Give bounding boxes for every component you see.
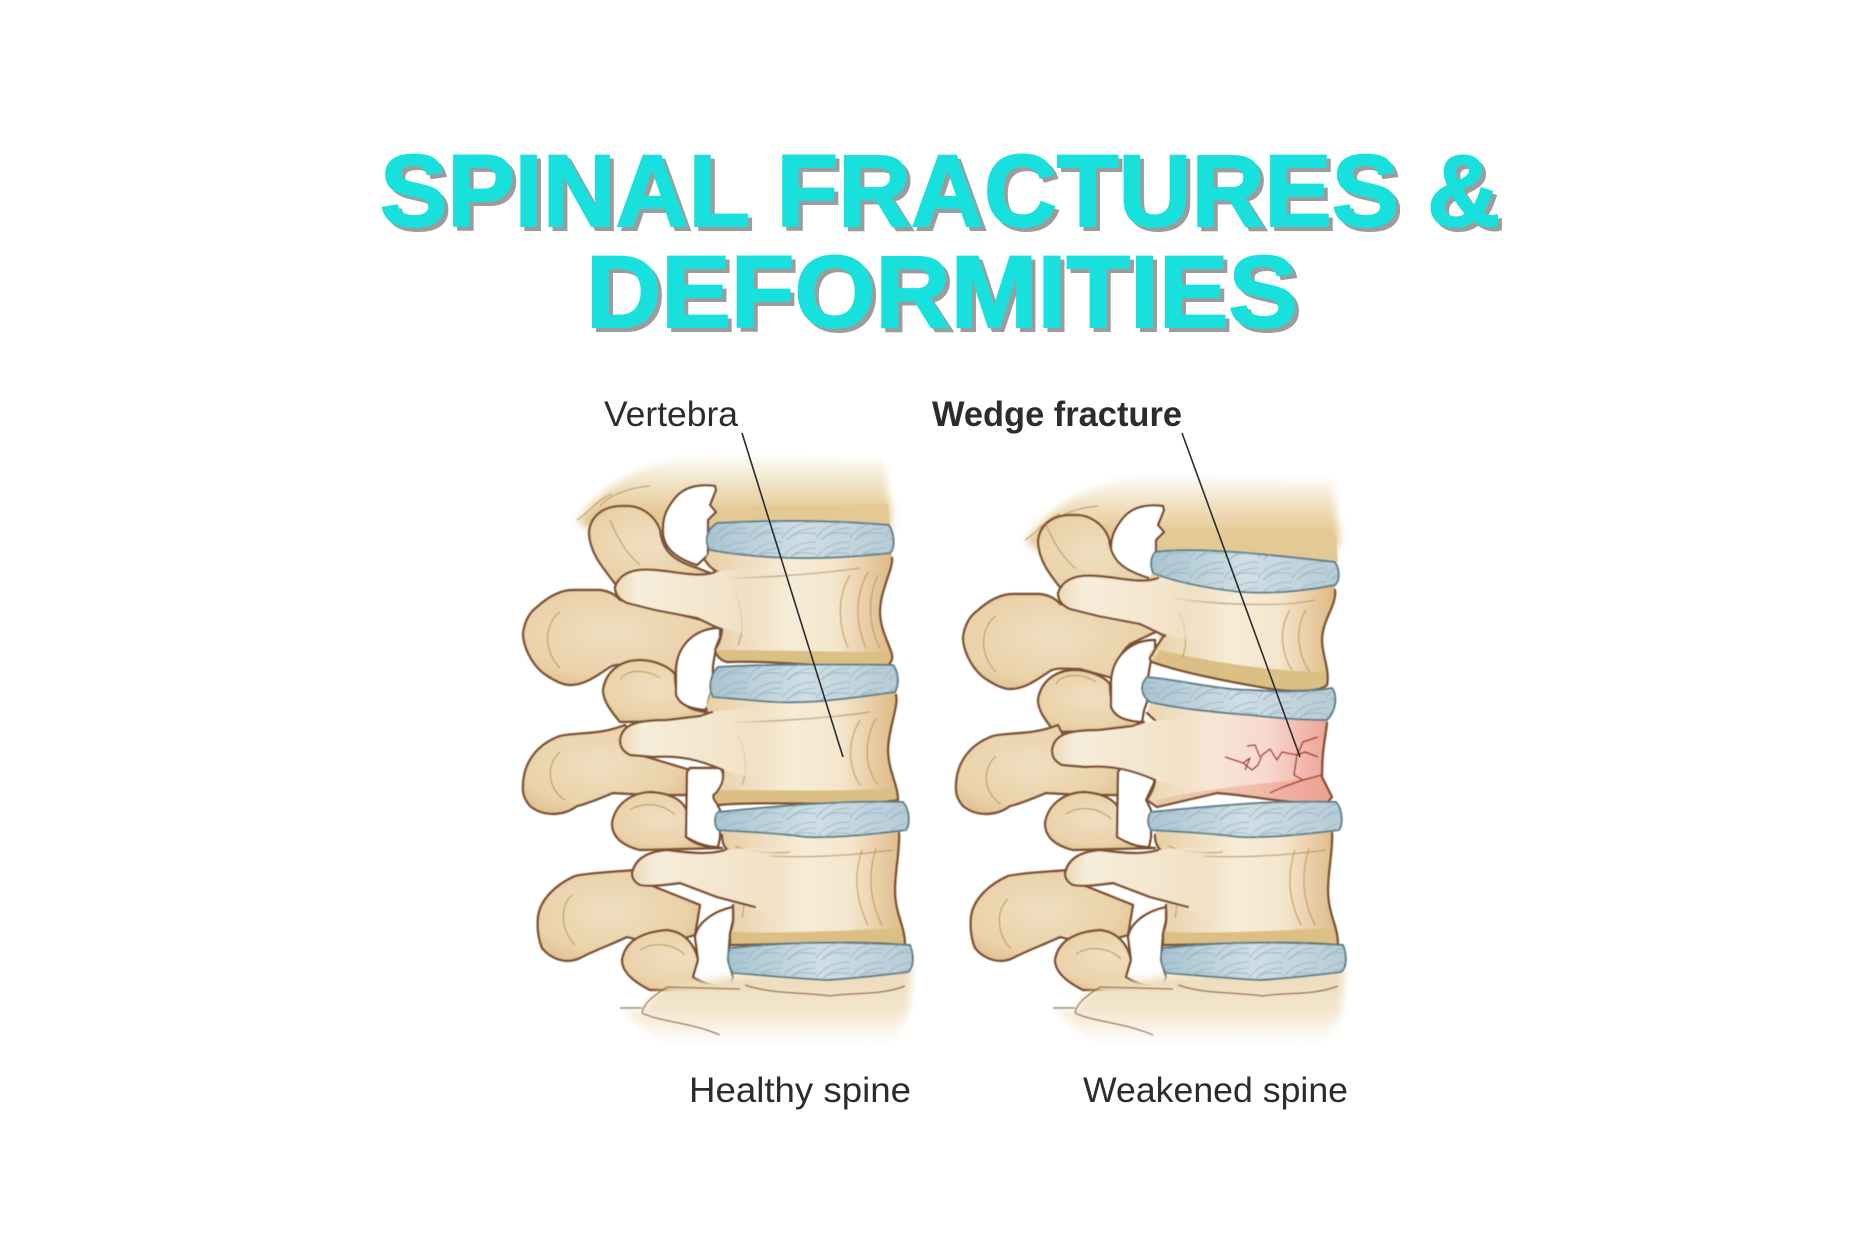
- intervertebral discs: [1142, 550, 1346, 980]
- fractured vertebra: [1147, 695, 1332, 807]
- leader line: vertebra: [742, 433, 843, 757]
- title line 2: DEFORMITIES: [586, 235, 1298, 349]
- label: wedge fracture: Wedge fracture: [932, 395, 1182, 434]
- label: healthy spine: Healthy spine: [689, 1071, 911, 1110]
- leader line: wedge fracture: [1182, 433, 1300, 757]
- illustration: weakened spine with wedge fracture: [956, 476, 1346, 1045]
- title shadow line 1: SPINAL FRACTURES &: [384, 138, 1504, 252]
- posterior elements: [956, 505, 1173, 990]
- title line 1: SPINAL FRACTURES &: [380, 134, 1500, 248]
- top body solid base: [1156, 536, 1338, 562]
- top arch fading: [578, 456, 891, 560]
- cracks: [1225, 737, 1322, 793]
- vertebra bodies: [1053, 568, 1345, 1045]
- title shadow line 2: DEFORMITIES: [590, 239, 1302, 353]
- label: weakened spine: Weakened spine: [1083, 1071, 1348, 1110]
- vertebra bodies: [620, 545, 912, 1045]
- intervertebral discs: [707, 521, 913, 980]
- transverse processes: [1052, 571, 1223, 925]
- top arch fading: [1026, 476, 1339, 580]
- posterior elements: [523, 485, 740, 990]
- illustration: healthy spine: [523, 456, 913, 1045]
- fracture outline: [1147, 713, 1332, 807]
- label: vertebra: Vertebra: [604, 395, 739, 434]
- title: [380, 134, 1504, 353]
- top body solid base: [708, 504, 890, 530]
- transverse processes: [615, 565, 790, 925]
